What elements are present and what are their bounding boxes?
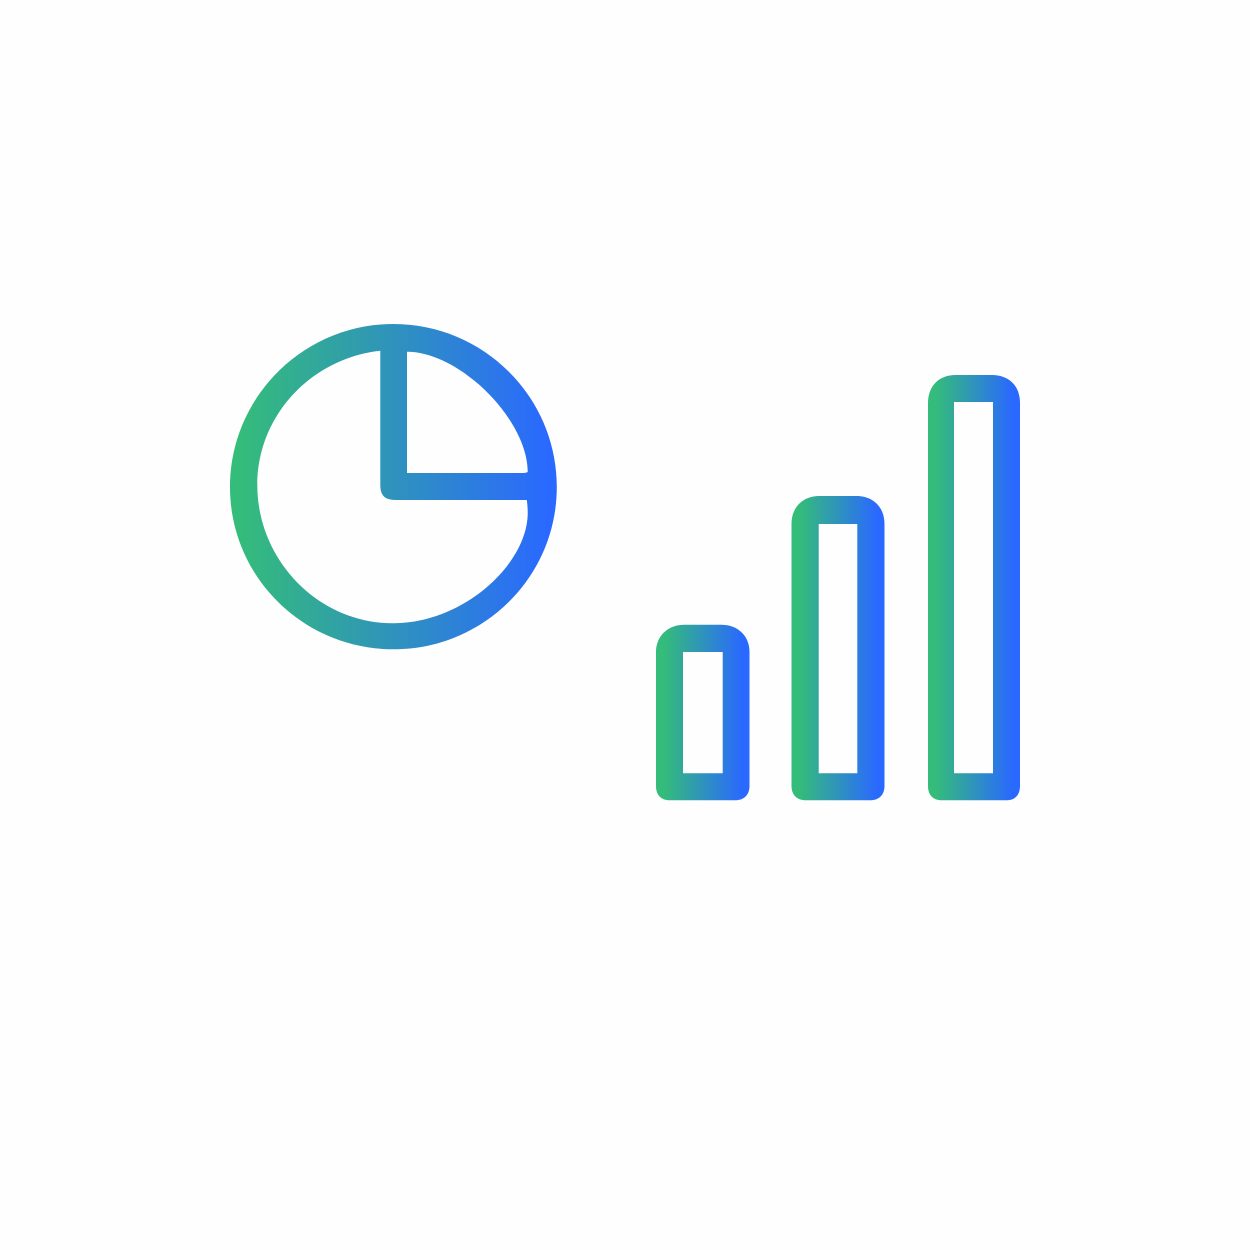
icon: pie chart [230, 324, 557, 649]
medium bar [792, 496, 884, 800]
short bar [656, 625, 750, 800]
icon: bar chart [656, 375, 1020, 800]
tall bar [928, 375, 1020, 800]
